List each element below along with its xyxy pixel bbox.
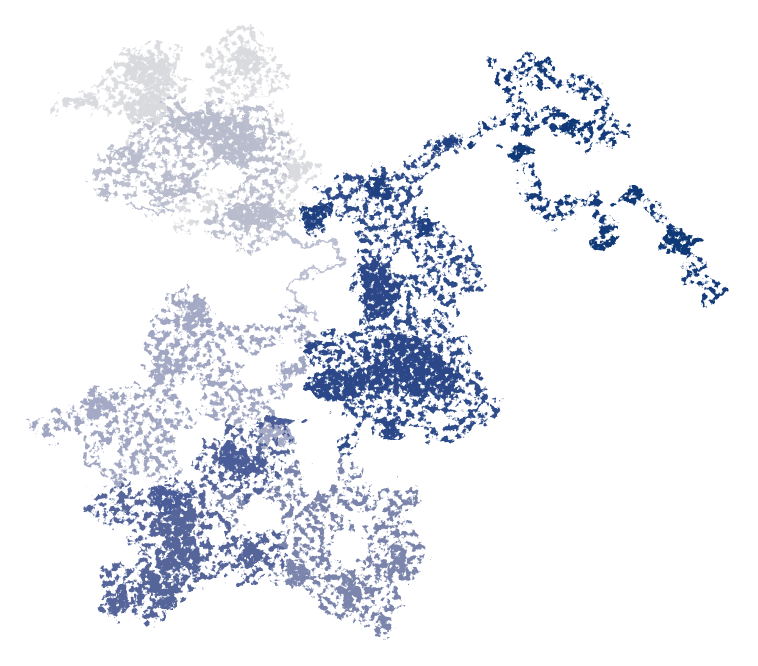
walk segment: darkest navy dense patches, upper right — [512, 62, 701, 248]
walk segment: grey-blue loose lobes — [100, 107, 286, 236]
walk segment: darkest navy loose strands, upper right — [465, 65, 710, 290]
walk segment: dark navy dense patches, upper centre — [305, 134, 458, 236]
walk segment: blue dense patches, centre — [145, 415, 302, 508]
walk segment: indigo loose lobes, lower left — [98, 438, 276, 614]
walk segment: light grey loose lobes — [62, 41, 306, 228]
walk segment: slate blue loose lobes, lower — [200, 445, 415, 625]
walk segment: connecting strand — [130, 195, 342, 320]
walk segment: pale blue loose lobes, left — [40, 304, 310, 475]
walk segment: pale blue dense patches — [91, 298, 295, 444]
walk segment: slate blue dense patches — [285, 492, 414, 627]
walk segment: indigo dense patches, lower left — [103, 499, 265, 610]
walk segment: grey-blue dense patches, upper left — [100, 109, 277, 227]
voids: empty gaps between walk loops — [100, 81, 572, 634]
walk segment: navy loose lobes, centre right — [310, 145, 490, 445]
walk segment: navy dense patches, centre right — [313, 264, 455, 441]
walk segment: light grey dense patches — [62, 47, 300, 179]
